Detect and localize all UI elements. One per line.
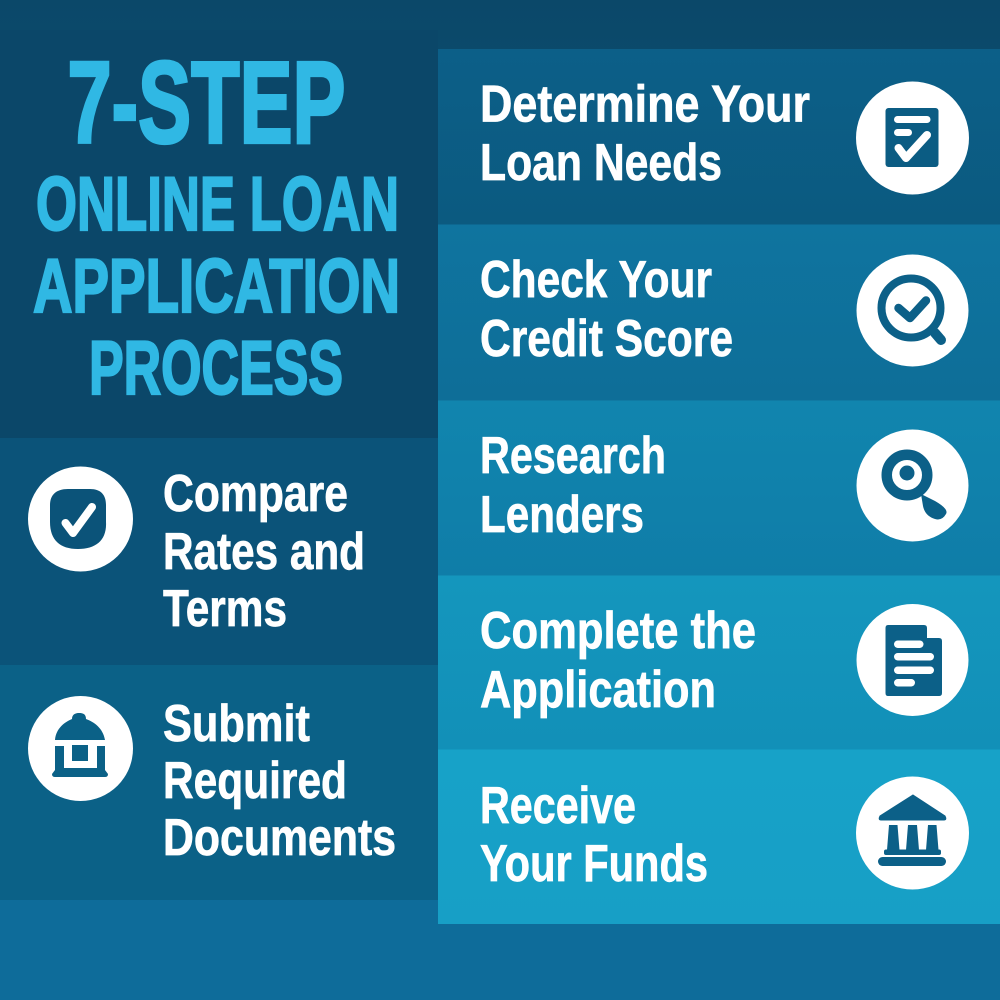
text: compare rates and terms: Compare: [163, 465, 348, 523]
text: check your credit score: Check Your: [480, 251, 712, 309]
text: compare rates and terms: Rates and: [163, 523, 365, 581]
icon: shield check: [28, 466, 133, 572]
title: ONLINE LOAN: ONLINE LOAN: [36, 162, 399, 247]
text: complete the application: Complete the: [480, 602, 756, 660]
panel: check your credit score: [438, 224, 1000, 400]
title: 7-STEP: 7-STEP: [68, 38, 346, 168]
text: determine your loan needs: Determine Your: [480, 76, 810, 134]
icon: bank: [856, 776, 969, 890]
text: check your credit score: [480, 251, 733, 368]
text: determine your loan needs: [480, 76, 810, 192]
text: research lenders: Research: [480, 427, 666, 485]
text: complete the application: Application: [480, 661, 716, 719]
panel: title: [0, 30, 438, 438]
text: determine your loan needs: Loan Needs: [480, 134, 722, 192]
title: PROCESS: PROCESS: [89, 326, 343, 411]
text: compare rates and terms: [163, 465, 365, 638]
icon: checklist: [856, 82, 969, 194]
text: compare rates and terms: Terms: [163, 580, 287, 638]
text: submit required documents: Documents: [163, 809, 396, 867]
text: submit required documents: Required: [163, 752, 347, 810]
text: receive your funds: [480, 777, 708, 893]
text: check your credit score: Credit Score: [480, 310, 733, 368]
text: complete the application: [480, 602, 756, 719]
panel: complete the application: [438, 576, 1000, 750]
panel: submit required documents: [0, 665, 438, 900]
icon: document: [856, 604, 968, 716]
icon: magnifier check: [856, 254, 968, 366]
text: research lenders: [480, 427, 666, 544]
text: research lenders: Lenders: [480, 486, 644, 544]
panel: research lenders: [438, 400, 1000, 576]
panel: receive your funds: [438, 750, 1000, 924]
text: submit required documents: Submit: [163, 695, 310, 753]
panel: determine your loan needs: [438, 49, 1000, 224]
text: receive your funds: Receive: [480, 777, 636, 835]
panel: compare rates and terms: [0, 438, 438, 665]
text: receive your funds: Your Funds: [480, 835, 708, 893]
text: submit required documents: [163, 695, 396, 867]
title: APPLICATION: APPLICATION: [33, 244, 400, 329]
icon: document dome: [28, 696, 133, 801]
icon: magnifier: [856, 430, 968, 542]
